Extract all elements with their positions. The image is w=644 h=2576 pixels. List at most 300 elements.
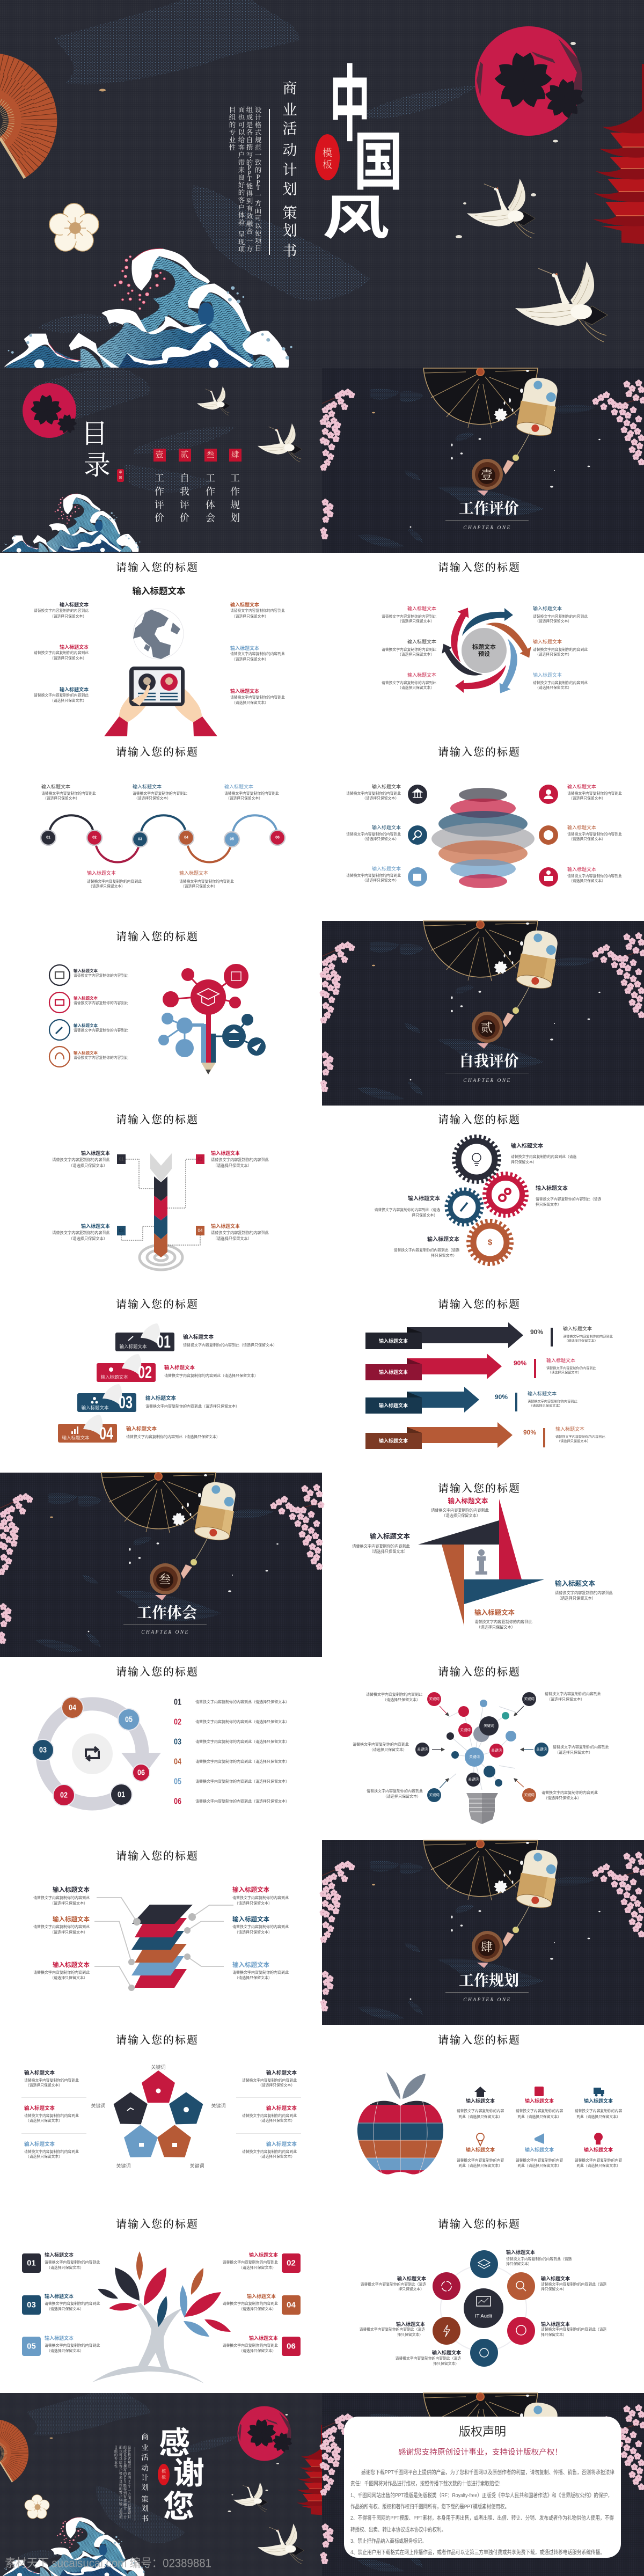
chapter background <box>320 921 644 1106</box>
slide title: 请输入您的标题 <box>116 931 199 943</box>
gear navy with pen <box>447 1189 482 1225</box>
arrow row 1: （请选择只保留文本） <box>565 1338 598 1343</box>
arrow row 4: 输入标题文本 <box>555 1426 584 1432</box>
spiral arrows: 标题文本 <box>472 643 496 650</box>
timeline upper labels: 输入标题文本 <box>41 784 70 789</box>
panel: tree slide <box>22 2218 301 2383</box>
illustration: great wave <box>4 248 292 369</box>
pentagon keywords: 关键词 <box>91 2103 106 2109</box>
vertical description: 目组的专业性 <box>114 2445 118 2469</box>
panel: chapter one slide <box>320 368 644 553</box>
scattered petals <box>372 412 601 528</box>
right labels: 输入标题文本 <box>533 672 562 678</box>
timeline lower labels: （请选择只保留文本） <box>181 883 217 889</box>
timeline nodes: 01 <box>46 836 50 839</box>
orbit ring <box>441 2265 526 2351</box>
vertical description: 面也可以给客户带来良好的客户体验呈现项 <box>238 106 245 253</box>
timeline lower labels: 请替换文字内容复制你的内容到此 <box>179 879 234 883</box>
left labels: 输入标题文本 <box>407 605 436 611</box>
pinwheel labels: （请选择只保留文本） <box>477 1625 515 1629</box>
contents title <box>81 419 111 480</box>
left text blocks: 请替换文字内容复制你的内容到此 <box>34 650 89 655</box>
slide title: 请输入您的标题 <box>438 1298 521 1311</box>
right layer labels: （请选择只保留文本） <box>235 1975 272 1980</box>
right tree text: 输入标题文本 <box>247 2293 276 2299</box>
timeline upper labels: 请替换文字内容复制你的内容到此 <box>224 791 279 795</box>
apple grid item 1 <box>457 2087 504 2119</box>
main title characters: 国 <box>354 127 403 198</box>
left layer labels: 输入标题文本 <box>53 1886 90 1893</box>
panel: spiral slide <box>382 561 588 697</box>
arrow slide text: 请替换文字内容复制你的内容到此 <box>52 1230 110 1235</box>
arrow row 1: 90% <box>530 1328 543 1336</box>
cherry blossoms right <box>592 379 644 465</box>
copyright body: 3、禁止把作品纳入商标或服务标记。 <box>350 2537 427 2544</box>
outer keywords: 关键词 <box>524 1696 535 1701</box>
left audit labels: 请替换文字内容复制你的内容到此（请选 <box>396 2356 461 2360</box>
contents item 3: 工作体会 <box>206 473 215 523</box>
left text blocks: （请选择只保留文本） <box>50 698 86 703</box>
right tree text: 输入标题文本 <box>249 2335 278 2341</box>
furry emblem <box>472 459 503 496</box>
pinwheel labels: 请替换文字内容复制你的内容到此 <box>474 1620 532 1624</box>
panel: pinwheel slide <box>352 1482 613 1629</box>
watermark: 素材天下 sucaisucai.com 编号：02389881 <box>5 2557 211 2570</box>
timeline lower labels: 输入标题文本 <box>179 870 208 876</box>
right labels: （请选择只保留文本） <box>535 652 572 657</box>
contents item 1: 壹 <box>155 450 164 459</box>
right icons <box>539 785 558 887</box>
right layer labels <box>232 1886 289 1980</box>
main title characters <box>323 59 403 244</box>
number squares: 03 <box>119 1228 124 1233</box>
right text: 输入标题文本 <box>567 784 596 789</box>
apple grid item 5: 请替换文字内容复制你的内容 <box>516 2157 563 2163</box>
panel: arrows percent slide <box>365 1298 613 1449</box>
bulb text: （请选择只保留文本） <box>544 1796 581 1800</box>
timeline upper labels: 请替换文字内容复制你的内容到此 <box>41 791 96 795</box>
tag 04 text <box>126 1425 220 1439</box>
chapter number: 贰 <box>481 1021 493 1035</box>
panel: chapter four slide <box>320 1840 644 2025</box>
pinwheel labels: 请替换文字内容复制你的内容到此 <box>555 1591 613 1595</box>
apple grid item 4: 到此（请选择只保留文本） <box>458 2163 502 2168</box>
cycle list: 请替换文字内容复制你的内容到此（请选择只保留文本） <box>195 1779 289 1784</box>
gear brown with money <box>469 1221 511 1264</box>
cycle node numbers: 03 <box>39 1745 47 1755</box>
vertical description: 设计格式规范一致的PPT一方面可以使项目 <box>128 2445 131 2519</box>
cycle list: 06 <box>174 1797 181 1806</box>
apple grid item 2: 到此（请选择只保留文本） <box>517 2114 561 2119</box>
bulb base <box>466 1793 498 1824</box>
right text blocks: （请选择只保留文本） <box>232 700 268 705</box>
arrow row 4: （请选择只保留文本） <box>557 1439 590 1444</box>
contents title: 目 <box>81 419 108 449</box>
right audit labels: 请替换文字内容复制你的内容到此（请选 <box>506 2256 572 2262</box>
cover slide background scene <box>0 0 644 369</box>
right pentagon text: （请选择只保留文本） <box>258 2154 295 2158</box>
left text: 请替换文字内容复制你的内容到此 <box>346 791 401 795</box>
right tree text: （请选择只保留文本） <box>239 2348 276 2353</box>
pinwheel labels: （请选择只保留文本） <box>442 1513 480 1518</box>
ring list icons <box>49 965 70 1067</box>
left layer labels: （请选择只保留文本） <box>50 1975 87 1980</box>
panel: light bulb slide <box>353 1666 609 1824</box>
tag 03: 03 <box>119 1393 133 1412</box>
left labels: （请选择只保留文本） <box>398 652 434 657</box>
illustration: crane lower <box>515 261 608 342</box>
left text blocks: 请替换文字内容复制你的内容到此 <box>34 608 89 613</box>
apple grid item 6: 输入标题文本 <box>584 2147 613 2153</box>
vertical divider <box>269 109 270 255</box>
outer keywords: 关键词 <box>417 1746 428 1752</box>
right text blocks: 请替换文字内容复制你的内容到此 <box>230 652 285 656</box>
cycle list <box>174 1698 289 1806</box>
right layer labels: 输入标题文本 <box>232 1886 269 1893</box>
pentagon keywords: 关键词 <box>211 2103 226 2109</box>
bulb circles: 关键词 <box>484 1723 494 1728</box>
left pentagon text: 请替换文字内容复制你的内容到此 <box>24 2149 79 2154</box>
number squares: 02 <box>198 1157 203 1161</box>
arrow slide text: 输入标题文本 <box>211 1223 240 1229</box>
bulb text: 请替换文字内容复制你的内容到此 <box>545 1692 601 1696</box>
right text: 输入标题文本 <box>567 866 596 872</box>
left audit labels: 择只保留文本） <box>433 2361 459 2366</box>
gear labels: 择只保留文本） <box>511 1159 537 1165</box>
slide title: 请输入您的标题 <box>116 2218 199 2230</box>
panel: copyright notice card <box>344 2417 621 2558</box>
panel: cycle list slide <box>32 1666 289 1806</box>
pinwheel labels: （请选择只保留文本） <box>557 1596 596 1600</box>
apple grid item 3 <box>575 2088 622 2119</box>
panel: thank you slide <box>0 2393 322 2576</box>
left labels: 输入标题文本 <box>407 672 436 678</box>
ring list text: 输入标题文本 <box>74 968 98 974</box>
left tree text <box>45 2252 100 2353</box>
apple grid item 2: 请替换文字内容复制你的内容 <box>516 2108 563 2113</box>
right layer labels: 输入标题文本 <box>232 1961 269 1968</box>
red seal: 板 <box>162 2474 166 2479</box>
arrow row 1: 输入标题文本 <box>379 1338 408 1344</box>
main title characters: 中 <box>330 59 370 151</box>
cherry blossoms left <box>320 389 355 539</box>
panel: stacked layers slide <box>33 1850 289 1991</box>
outer keywords: 关键词 <box>429 1696 440 1701</box>
vertical description: 设计格式规范一致的PPT一方面可以使项目 <box>255 106 262 252</box>
gear labels: 请替换文字内容复制你的内容到此（请选 <box>511 1154 577 1159</box>
thank you title <box>159 2426 204 2524</box>
right text blocks <box>230 602 285 705</box>
apple grid item 6: 请替换文字内容复制你的内容 <box>575 2157 622 2163</box>
bulb circles: 关键词 <box>491 1747 502 1753</box>
timeline upper labels: 请替换文字内容复制你的内容到此 <box>133 791 187 795</box>
number squares <box>117 1154 204 1235</box>
left pentagon text: （请选择只保留文本） <box>26 2154 62 2158</box>
arrow row 4: 输入标题文本 <box>379 1438 408 1444</box>
gear labels: 请替换文字内容复制你的内容到此（请选 <box>536 1197 602 1201</box>
arrow slide text <box>52 1150 269 1241</box>
bulb circles: 关键词 <box>469 1754 480 1759</box>
right labels: 请替换文字内容复制你的内容到此 <box>533 680 588 685</box>
left number cards: 03 <box>27 2300 36 2310</box>
timeline lower labels: 输入标题文本 <box>87 870 116 876</box>
right pentagon text: （请选择只保留文本） <box>258 2082 295 2088</box>
tag 01: 输入标题文本 <box>119 1344 147 1349</box>
left pentagon text: 请替换文字内容复制你的内容到此 <box>24 2113 79 2118</box>
contents item 2: 自我评价 <box>180 473 189 523</box>
cycle ring <box>42 1704 161 1804</box>
right text: 请替换文字内容复制你的内容到此 <box>567 874 622 878</box>
left labels: 请替换文字内容复制你的内容到此 <box>382 647 436 652</box>
chapter background scene <box>320 368 644 553</box>
timeline nodes <box>41 830 285 847</box>
right layer labels: （请选择只保留文本） <box>235 1901 272 1905</box>
ring list text: 请替换文字内容复制你的内容到此 <box>74 1000 128 1005</box>
tag 02 text: 输入标题文本 <box>164 1364 195 1371</box>
cycle list: 01 <box>174 1698 181 1707</box>
panel: tablet slide <box>34 561 285 736</box>
right text blocks: 输入标题文本 <box>230 688 259 694</box>
vertical description: 面也可以给客户带来良好的客户体验呈现项 <box>119 2445 123 2519</box>
right number cards: 04 <box>287 2300 296 2310</box>
copyright body: 责任！千图网将对作品进行维权，按照传播下载次数的十倍进行索取赔偿！ <box>350 2480 503 2487</box>
bulb text: （请选择只保留文本） <box>369 1747 407 1752</box>
bulb text: （请选择只保留文本） <box>383 1697 420 1702</box>
tag 02: 输入标题文本 <box>100 1374 128 1380</box>
right audit labels <box>506 2249 607 2337</box>
left tree text: 请替换文字内容复制你的内容到此 <box>45 2343 100 2347</box>
right tree text: 请替换文字内容复制你的内容到此 <box>223 2343 278 2347</box>
chapter subtitle: CHAPTER ONE <box>463 1997 511 2003</box>
apple grid item 6 <box>575 2133 622 2168</box>
left text <box>346 784 401 882</box>
right text: （请选择只保留文本） <box>569 878 605 883</box>
cycle node numbers: 02 <box>60 1790 68 1800</box>
ring list text: 输入标题文本 <box>74 1023 98 1028</box>
right labels: 输入标题文本 <box>533 605 562 611</box>
centered subtitle: 输入标题文本 <box>132 586 186 596</box>
slide title: 请输入您的标题 <box>116 1850 199 1862</box>
left text blocks: （请选择只保留文本） <box>50 656 86 660</box>
pinwheel labels: 输入标题文本 <box>370 1532 410 1540</box>
stacked ellipses chart <box>431 788 535 888</box>
chapter number: 叁 <box>159 1572 171 1586</box>
arrow slide text: 输入标题文本 <box>211 1150 240 1156</box>
tag 03 text: 请替换文字内容复制你的内容到此（请选择只保留文本） <box>145 1404 239 1408</box>
left audit labels <box>360 2275 461 2366</box>
panel: peeled tags slide <box>58 1298 277 1443</box>
icon: wind chime lantern <box>516 375 560 438</box>
left text: 输入标题文本 <box>372 784 401 789</box>
arrow slide text: 请替换文字内容复制你的内容到此 <box>211 1230 269 1235</box>
left text: 输入标题文本 <box>372 866 401 872</box>
scene background <box>0 2393 322 2576</box>
chapter rule <box>123 1624 207 1625</box>
arrow row 3: 输入标题文本 <box>528 1391 557 1396</box>
left layer labels: 输入标题文本 <box>53 1915 90 1923</box>
timeline upper labels: 输入标题文本 <box>133 784 162 789</box>
right tree text: 请替换文字内容复制你的内容到此 <box>223 2259 278 2265</box>
arrow row 3: 请替换文字内容复制你的内容到此 <box>528 1400 577 1404</box>
right audit labels: 请替换文字内容复制你的内容到此（请选 <box>541 2282 607 2286</box>
copyright body <box>350 2469 614 2556</box>
contents title: 录 <box>84 450 111 480</box>
panel: gears slide <box>375 1114 602 1264</box>
right pentagon text: 输入标题文本 <box>266 2141 297 2148</box>
slide title: 请输入您的标题 <box>116 2034 199 2046</box>
ring list text <box>74 968 128 1060</box>
pinwheel labels: 输入标题文本 <box>555 1579 596 1587</box>
left text blocks: 输入标题文本 <box>60 602 89 608</box>
pinwheel labels: 请替换文字内容复制你的内容到此 <box>431 1508 489 1512</box>
small seal <box>117 469 124 482</box>
chapter title: 自我评价 <box>459 1053 519 1070</box>
chapter title: 工作体会 <box>137 1605 197 1622</box>
pinwheel labels: 输入标题文本 <box>448 1497 488 1505</box>
chapter number: 肆 <box>481 1941 493 1953</box>
tag 01 text: 输入标题文本 <box>183 1334 214 1341</box>
arrow row 3: 90% <box>495 1393 508 1401</box>
left labels: 输入标题文本 <box>407 639 436 645</box>
left layer labels: 输入标题文本 <box>53 1961 90 1968</box>
gear labels: 请替换文字内容复制你的内容到此（请选 <box>375 1208 440 1212</box>
pinwheel labels: 请替换文字内容复制你的内容到此 <box>352 1543 410 1549</box>
right audit labels: 输入标题文本 <box>541 2275 570 2281</box>
cycle list: 请替换文字内容复制你的内容到此（请选择只保留文本） <box>195 1799 289 1803</box>
chapter background <box>320 1840 644 2025</box>
right pentagon text: 请替换文字内容复制你的内容到此 <box>242 2078 297 2082</box>
pinwheel labels: （请选择只保留文本） <box>369 1549 408 1554</box>
right text <box>567 784 622 883</box>
illustration: pagoda <box>593 64 644 244</box>
left labels: 请替换文字内容复制你的内容到此 <box>382 680 436 685</box>
right layer labels: 输入标题文本 <box>232 1915 269 1923</box>
cycle list: 请替换文字内容复制你的内容到此（请选择只保留文本） <box>195 1739 289 1744</box>
right labels: 输入标题文本 <box>533 639 562 645</box>
tree leaves <box>98 2251 231 2337</box>
left tree text: 输入标题文本 <box>45 2293 74 2299</box>
right text blocks: 请替换文字内容复制你的内容到此 <box>230 608 285 613</box>
slide title: 请输入您的标题 <box>116 1666 199 1678</box>
left layer labels: （请选择只保留文本） <box>50 1930 87 1934</box>
slide title: 请输入您的标题 <box>438 746 521 758</box>
number squares: 01 <box>119 1157 124 1161</box>
left tree text: 请替换文字内容复制你的内容到此 <box>45 2259 100 2265</box>
slide title: 请输入您的标题 <box>438 2034 521 2046</box>
right pentagon text: 输入标题文本 <box>266 2105 297 2111</box>
timeline nodes: 04 <box>184 836 188 839</box>
apple grid item 4: 请替换文字内容复制你的内容 <box>457 2157 504 2163</box>
arrow row 4: 请替换文字内容复制你的内容到此 <box>555 1435 605 1439</box>
tag 04: 输入标题文本 <box>62 1435 90 1440</box>
timeline upper labels: （请选择只保留文本） <box>43 795 79 801</box>
left text: 请替换文字内容复制你的内容到此 <box>346 832 401 836</box>
arrow row 1: 输入标题文本 <box>563 1326 592 1331</box>
chevron arrow <box>150 1153 172 1257</box>
chapter subtitle: CHAPTER ONE <box>463 525 511 531</box>
left tree text: 输入标题文本 <box>45 2252 74 2258</box>
left text: 输入标题文本 <box>372 824 401 830</box>
contents item 2: 贰 <box>180 450 189 459</box>
thank you title: 您 <box>163 2489 194 2524</box>
illustration: crane upper <box>467 179 535 238</box>
outer keywords: 关键词 <box>429 1792 440 1797</box>
right layer labels: 请替换文字内容复制你的内容到此 <box>232 1970 289 1975</box>
small white specks <box>99 42 576 238</box>
arrow slide text: （请选择只保留文本） <box>213 1236 252 1241</box>
layered parallelograms <box>131 1905 193 1988</box>
right pentagon text: （请选择只保留文本） <box>258 2118 295 2123</box>
thank you title: 谢 <box>173 2456 204 2491</box>
timeline nodes: 03 <box>138 837 142 841</box>
right text: 输入标题文本 <box>567 824 596 830</box>
left audit labels: 输入标题文本 <box>432 2350 461 2355</box>
left layer labels: 请替换文字内容复制你的内容到此 <box>33 1924 90 1929</box>
gear labels: 输入标题文本 <box>427 1235 459 1243</box>
cycle node numbers: 01 <box>118 1790 125 1799</box>
left layer labels: （请选择只保留文本） <box>50 1901 87 1905</box>
ring list text: 请替换文字内容复制你的内容到此 <box>74 973 128 978</box>
orbit nodes <box>433 2250 535 2367</box>
crane upper <box>197 386 230 415</box>
chapter title: 工作规划 <box>459 1972 519 1989</box>
arrow row 4: 90% <box>523 1429 536 1436</box>
vertical description: 组成是各自撰写的PPT能得到有效融合一方 <box>246 106 253 253</box>
left pentagon text: 输入标题文本 <box>24 2141 55 2148</box>
apple grid item 1: 到此（请选择只保留文本） <box>458 2114 502 2119</box>
copyright body: 转授权、出卖、转让本协议或本协议中的权利。 <box>350 2526 446 2533</box>
right layer labels: 请替换文字内容复制你的内容到此 <box>232 1924 289 1929</box>
network connectors <box>447 1703 515 1790</box>
bulb text <box>353 1692 609 1800</box>
right audit labels: 输入标题文本 <box>541 2321 570 2327</box>
tag 04 text: 请替换文字内容复制你的内容到此（请选择只保留文本） <box>126 1434 220 1439</box>
target rings <box>140 1245 182 1270</box>
slide title: 请输入您的标题 <box>438 1482 521 1495</box>
gear labels: 输入标题文本 <box>408 1195 440 1202</box>
right text blocks: 请替换文字内容复制你的内容到此 <box>230 694 285 700</box>
bulb text: 请替换文字内容复制你的内容到此 <box>541 1790 598 1795</box>
left tree text: 请替换文字内容复制你的内容到此 <box>45 2301 100 2306</box>
tree trunk and ground <box>92 2303 204 2383</box>
connectors <box>94 1898 233 1988</box>
pentagon keywords <box>91 2064 226 2169</box>
arrow slide text: 请替换文字内容复制你的内容到此 <box>211 1157 269 1162</box>
arrow row 1 <box>365 1322 613 1349</box>
vertical description <box>229 106 262 253</box>
apple grid item 2: 输入标题文本 <box>525 2098 554 2104</box>
slide title: 请输入您的标题 <box>438 1114 521 1126</box>
arrow row 2 <box>365 1353 596 1380</box>
small arrows <box>432 1706 533 1788</box>
apple grid item 1: 输入标题文本 <box>466 2098 495 2104</box>
bulb text: 请替换文字内容复制你的内容到此 <box>353 1742 409 1746</box>
gear labels: 输入标题文本 <box>536 1185 568 1191</box>
right text blocks: （请选择只保留文本） <box>232 657 268 661</box>
chapter rule <box>445 520 529 521</box>
left text: （请选择只保留文本） <box>362 795 399 801</box>
panel: chapter three slide <box>0 1473 324 1657</box>
left text blocks: 请替换文字内容复制你的内容到此 <box>34 692 89 698</box>
red seal: 模 <box>323 148 332 158</box>
cycle node numbers: 06 <box>137 1768 145 1777</box>
right text blocks: 输入标题文本 <box>230 602 259 608</box>
illustration: hands holding tablet <box>104 667 217 736</box>
tag 04: 04 <box>99 1424 113 1443</box>
chapter subtitle: CHAPTER ONE <box>463 1078 511 1084</box>
vertical subtitle: 商业活动计划策划书 <box>141 2433 149 2522</box>
cycle list: 04 <box>174 1757 181 1767</box>
